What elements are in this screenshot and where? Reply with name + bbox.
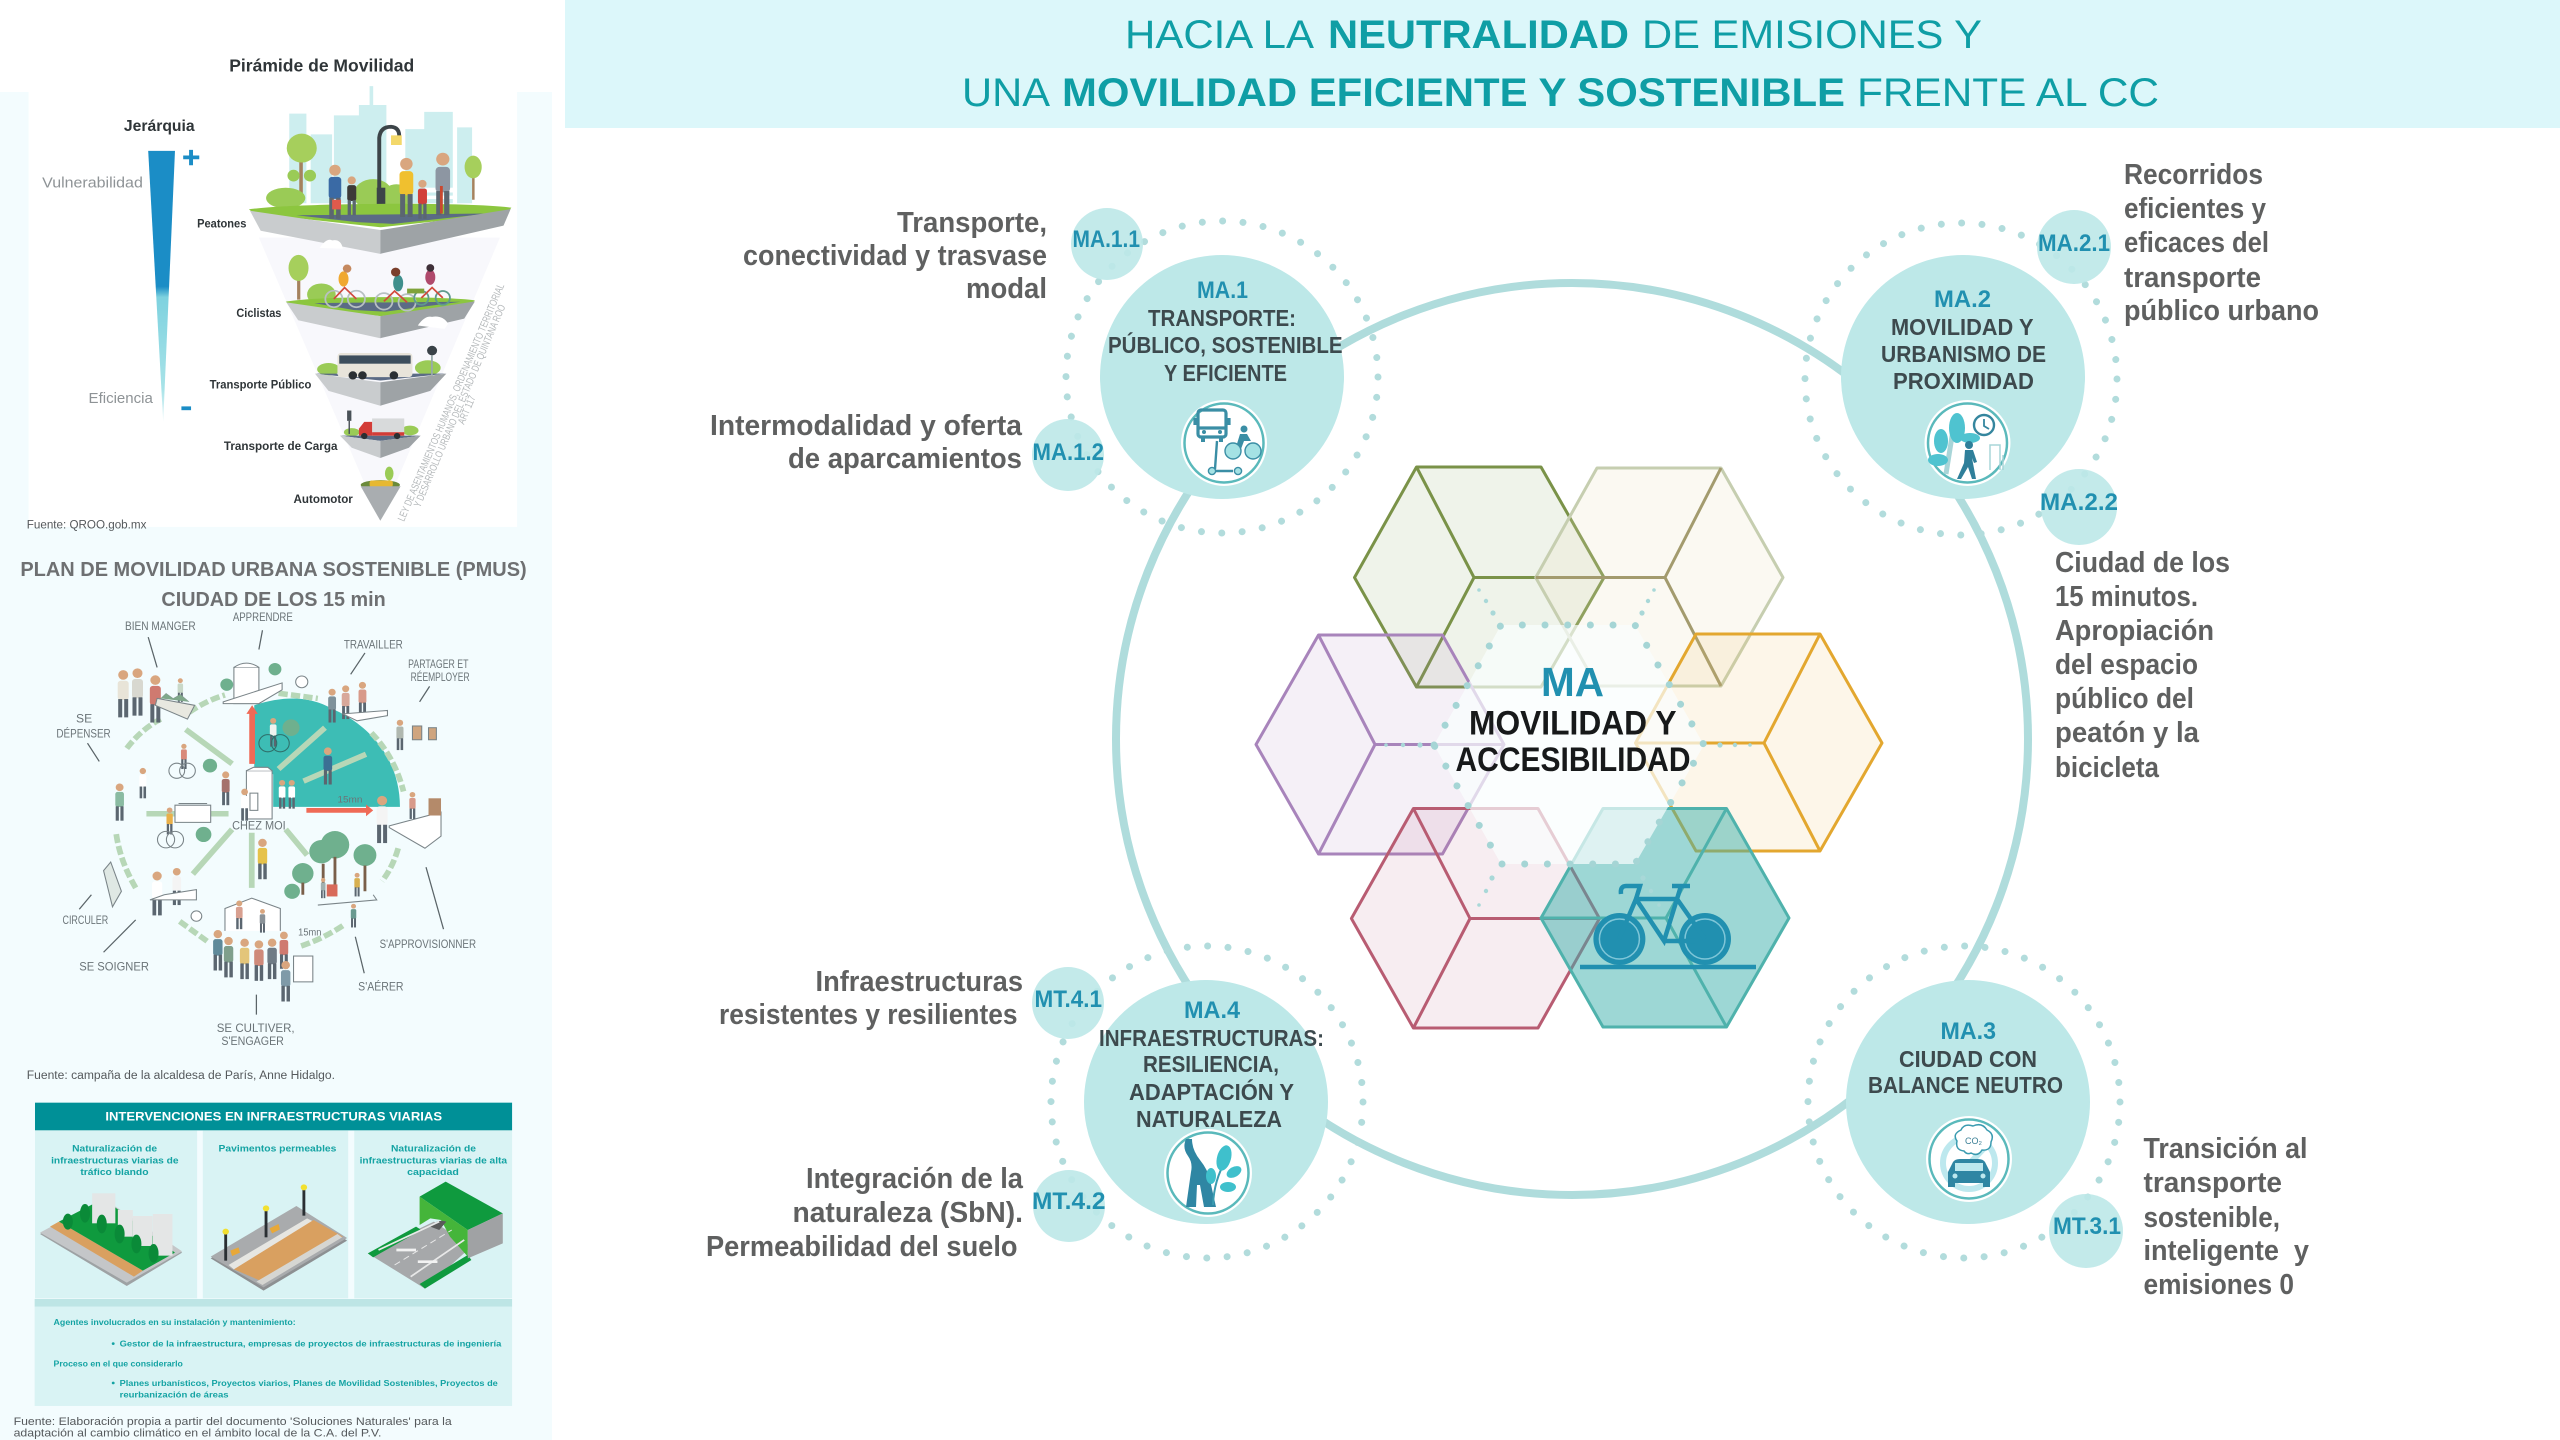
activity labels: SE xyxy=(76,712,92,725)
activity labels: S'AÉRER xyxy=(358,979,404,993)
icon: tree, clock and pedestrian xyxy=(1924,400,2010,486)
activity labels: CHEZ MOI xyxy=(232,818,286,832)
level 3: public transport xyxy=(315,346,446,406)
text: MT.4.2 description: naturaleza (SbN). xyxy=(792,1197,1023,1229)
main bubble xyxy=(1100,255,1344,499)
level 5: private car xyxy=(361,467,401,521)
bubble text: PROXIMIDAD xyxy=(1893,368,2034,394)
activity labels: DÉPENSER xyxy=(56,726,111,740)
text: MA.2.1 description xyxy=(2124,159,2319,327)
text: MA.2.2 description: 15 minutos. xyxy=(2055,581,2198,613)
agents and process text xyxy=(54,1317,502,1399)
level 5 label: Automotor xyxy=(294,492,353,506)
central dotted hexagon xyxy=(1384,588,1752,907)
level 1 label: Peatones xyxy=(197,217,247,230)
panel: left column background xyxy=(0,92,552,1440)
title banner: NEUTRALIDAD xyxy=(1328,13,1629,57)
activity labels: PARTAGER ET xyxy=(408,657,469,671)
agents and process text: Gestor de la infraestructura, empresas de proyectos de infraestructuras de ingeniería xyxy=(120,1339,502,1349)
central haze xyxy=(1434,625,1704,864)
column headings: capacidad xyxy=(407,1167,459,1178)
bubble text: TRANSPORTE: xyxy=(1148,305,1296,331)
bubble text: CIUDAD CON xyxy=(1899,1046,2037,1072)
text: MA.1.1 description: conectividad y trasvase xyxy=(743,240,1047,272)
vulnerability label: Vulnerabilidad xyxy=(42,175,143,192)
text: MA.1.1 description xyxy=(743,207,1047,305)
panel: pirámide de movilidad xyxy=(27,55,517,532)
label MA.2.1: MA.2.1 xyxy=(2038,230,2110,257)
sub-bubble MT.3.1 xyxy=(2049,1194,2123,1268)
text: MT.4.1 description: Infraestructuras xyxy=(816,966,1023,998)
bubble text: BALANCE NEUTRO xyxy=(1868,1072,2063,1098)
text: MT.3.1 description xyxy=(2144,1133,2309,1301)
title banner xyxy=(565,0,2560,128)
label MA.1.2: MA.1.2 xyxy=(1032,439,1104,466)
bubble text: PÚBLICO, SOSTENIBLE xyxy=(1108,331,1342,358)
header bar: INTERVENCIONES EN INFRAESTRUCTURAS VIARIAS xyxy=(105,1110,442,1124)
text: MA.2.2 description: Ciudad de los xyxy=(2055,547,2230,579)
label MA.1.1: MA.1.1 xyxy=(1072,226,1140,253)
activity labels: CIRCULER xyxy=(62,913,108,927)
efficiency label: Eficiencia xyxy=(89,390,153,407)
sub-bubble MT.4.1 xyxy=(1032,967,1104,1039)
sub-bubble MT.4.2 xyxy=(1033,1170,1105,1242)
activity labels: TRAVAILLER xyxy=(344,638,403,651)
text: MA.2.2 description: bicicleta xyxy=(2055,752,2160,784)
home building xyxy=(246,767,272,819)
activity labels: 15mn xyxy=(298,928,321,938)
city heading: CIUDAD DE LOS 15 min xyxy=(161,588,386,611)
level 4: freight xyxy=(340,411,421,458)
text: MA.2.2 description: peatón y la xyxy=(2055,717,2200,749)
level 2 label: Ciclistas xyxy=(236,306,282,320)
bubble text: Y EFICIENTE xyxy=(1164,360,1287,386)
rotated legal note: Y DESARROLLO URBANO DEL ESTADO DE QUINTANA ROO xyxy=(412,303,508,509)
PMUS heading: PLAN DE MOVILIDAD URBANA SOSTENIBLE (PMUS) xyxy=(20,558,527,581)
activity labels: 15mn xyxy=(337,795,362,804)
agents and process text: Proceso en el que considerarlo xyxy=(54,1359,183,1369)
node: MA.2 xyxy=(1805,210,2117,545)
dotted orbit xyxy=(1808,946,2120,1258)
large connecting ring xyxy=(1116,283,2028,1195)
label MT.3.1: MT.3.1 xyxy=(2053,1213,2121,1240)
header bar xyxy=(35,1103,512,1130)
dotted orbit xyxy=(1066,221,1378,533)
bubble text xyxy=(1108,277,1342,386)
light panels xyxy=(35,1131,512,1406)
dotted orbit xyxy=(1051,946,1363,1258)
text: MA.2.2 description: público del xyxy=(2055,683,2194,715)
icon: road with plant xyxy=(1164,1129,1252,1217)
label pointers xyxy=(79,630,444,1015)
text: MA.2.1 description: eficientes y xyxy=(2124,193,2266,225)
source xyxy=(14,1416,453,1440)
sub-bubble MA.2.2 xyxy=(2041,469,2117,545)
hexagon: teal xyxy=(1541,808,1789,1027)
soft traffic street illustration xyxy=(40,1193,182,1286)
level 1: pedestrians xyxy=(249,86,511,254)
school xyxy=(223,663,282,704)
text: MA.1.1 description: Transporte, xyxy=(897,207,1047,239)
column headings: Pavimentos permeables xyxy=(219,1144,336,1155)
rotated legal note: ART 117 xyxy=(456,394,479,426)
bubble text: RESILIENCIA, xyxy=(1143,1051,1279,1077)
bubble text: URBANISMO DE xyxy=(1881,341,2046,367)
text: MA.2.2 description: Apropiación xyxy=(2055,615,2214,647)
hierarchy label: Jerárquia xyxy=(124,117,196,135)
hexagon: sand xyxy=(1536,468,1783,686)
text: MT.4.1 description: resistentes y resilientes xyxy=(719,999,1018,1031)
text: MA.1.2 description xyxy=(710,410,1023,475)
teal quarter zone xyxy=(254,699,400,807)
street trees xyxy=(196,663,376,899)
title banner: HACIA LA xyxy=(1125,13,1314,57)
rotated legal note: LEY DE ASENTAMIENTOS HUMANOS, ORDENAMIENTO TERRITORIAL xyxy=(396,282,507,523)
green paths xyxy=(116,693,404,946)
text: MT.3.1 description: transporte xyxy=(2144,1167,2282,1199)
icon: bicycle xyxy=(1580,886,1756,967)
level 2: cyclists xyxy=(286,255,475,338)
center title: ACCESIBILIDAD xyxy=(1456,741,1690,779)
title banner: FRENTE AL CC xyxy=(1857,71,2159,115)
bubble text: MA.4 xyxy=(1184,997,1241,1024)
bubble text: NATURALEZA xyxy=(1136,1106,1282,1132)
activity labels xyxy=(56,610,476,1048)
column headings: infraestructuras viarias de xyxy=(51,1156,179,1166)
text: MT.4.1 description xyxy=(719,966,1023,1031)
chart title: Pirámide de Movilidad xyxy=(229,55,414,75)
white image backing xyxy=(29,59,517,527)
text: MT.4.2 description xyxy=(706,1163,1024,1263)
text: MA.1.2 description: de aparcamientos xyxy=(788,443,1022,475)
activity labels: SE SOIGNER xyxy=(79,960,149,973)
bubble text xyxy=(1881,286,2046,394)
main bubble xyxy=(1084,980,1328,1224)
bubble text xyxy=(1868,1018,2063,1098)
center title xyxy=(1456,659,1690,779)
central hexagon cluster xyxy=(1256,467,1882,1028)
main bubble xyxy=(1841,255,2085,499)
bubble text: INFRAESTRUCTURAS: xyxy=(1099,1025,1324,1051)
text: MT.3.1 description: sostenible, xyxy=(2144,1202,2280,1234)
agents and process text: reurbanización de áreas xyxy=(120,1390,229,1399)
funnel xyxy=(259,238,500,520)
panel: intervenciones en infraestructuras viarias xyxy=(14,1103,512,1440)
hierarchy wedge xyxy=(148,151,175,422)
text: MA.2.1 description: Recorridos xyxy=(2124,159,2263,191)
text: MA.2.2 description: del espacio xyxy=(2055,649,2198,681)
rotated legal note xyxy=(396,282,508,523)
center title: MA xyxy=(1541,659,1604,705)
bubble text: MA.2 xyxy=(1934,286,1991,313)
bubble text: ADAPTACIÓN Y xyxy=(1129,1078,1294,1105)
label MT.4.1: MT.4.1 xyxy=(1034,986,1102,1013)
text: MA.2.1 description: eficaces del xyxy=(2124,227,2269,259)
bubble text: MA.1 xyxy=(1197,277,1248,304)
panel: ciudad de los 15 minutos xyxy=(20,558,527,1082)
dotted orbit xyxy=(1805,223,2117,535)
title banner: UNA xyxy=(962,71,1050,115)
title banner: DE EMISIONES Y xyxy=(1642,13,1982,57)
people and activities xyxy=(104,668,441,1001)
icon: car with CO2 cloud xyxy=(1926,1116,2012,1202)
title banner: MOVILIDAD EFICIENTE Y SOSTENIBLE xyxy=(1062,71,1845,115)
node: MA.1 xyxy=(1032,208,1378,533)
text: MT.3.1 description: emisiones 0 xyxy=(2144,1269,2294,1301)
bubble text: MOVILIDAD Y xyxy=(1891,314,2034,340)
activity labels: S'ENGAGER xyxy=(221,1034,284,1048)
red arrows xyxy=(246,705,373,816)
source: Fuente: Elaboración propia a partir del documento 'Soluciones Naturales' para la xyxy=(14,1416,453,1428)
text: MA.1.2 description: Intermodalidad y oferta xyxy=(710,410,1023,442)
text: MA.2.2 description xyxy=(2055,547,2230,784)
source: adaptación al cambio climático en el ámbito local de la C.A. del P.V. xyxy=(14,1428,381,1440)
column headings xyxy=(51,1144,508,1178)
sub-bubble MA.1.1 xyxy=(1071,208,1143,280)
level 3 label: Transporte Público xyxy=(210,378,311,391)
column headings: Naturalización de xyxy=(391,1144,477,1155)
source: Fuente: campaña de la alcaldesa de París, Anne Hidalgo. xyxy=(27,1068,335,1082)
permeable pavement illustration xyxy=(211,1184,347,1291)
node: MA.4 xyxy=(1032,946,1363,1258)
activity labels: RÉEMPLOYER xyxy=(411,669,470,684)
agents and process text: Planes urbanísticos, Proyectos viarios, Planes de Movilidad Sostenibles, Proyectos de xyxy=(120,1378,498,1388)
bubble text: MA.3 xyxy=(1940,1018,1996,1045)
plus sign xyxy=(183,150,199,165)
sub-bubble MA.2.1 xyxy=(2037,210,2111,284)
node: MA.3 xyxy=(1808,946,2123,1268)
column headings: tráfico blando xyxy=(80,1167,149,1178)
minus sign xyxy=(181,406,191,410)
activity labels: APPRENDRE xyxy=(233,610,293,624)
icon: bus, bicycle and scooter xyxy=(1181,400,1267,486)
bubble text xyxy=(1099,997,1324,1132)
strip xyxy=(35,1299,512,1307)
main bubble xyxy=(1846,980,2090,1224)
source: Fuente: QROO.gob.mx xyxy=(27,518,146,532)
agents and process text: Agentes involucrados en su instalación y mantenimiento: xyxy=(54,1317,296,1327)
text: MA.2.1 description: transporte xyxy=(2124,262,2261,294)
activity labels: S'APPROVISIONNER xyxy=(380,937,476,951)
text: MA.1.1 description: modal xyxy=(966,273,1047,305)
text: MA.2.1 description: público urbano xyxy=(2124,295,2319,327)
activity labels: BIEN MANGER xyxy=(125,619,196,633)
column headings: infraestructuras viarias de alta xyxy=(360,1156,508,1166)
level 4 label: Transporte de Carga xyxy=(224,439,338,453)
label MA.2.2: MA.2.2 xyxy=(2040,489,2118,516)
hexagon: red xyxy=(1351,808,1600,1028)
sub-bubble MA.1.2 xyxy=(1032,419,1104,491)
hexagon: olive xyxy=(1354,467,1604,687)
column headings: Naturalización de xyxy=(72,1144,158,1155)
text: MT.4.2 description: Permeabilidad del suelo xyxy=(706,1231,1018,1263)
icon: car with CO2 cloud: CO₂ xyxy=(1965,1136,1982,1146)
activity labels: SE CULTIVER, xyxy=(217,1021,295,1035)
hexagon: orange xyxy=(1636,634,1882,851)
center title: MOVILIDAD Y xyxy=(1469,704,1677,742)
label MT.4.2: MT.4.2 xyxy=(1032,1188,1106,1215)
high capacity road tunnel illustration xyxy=(368,1182,503,1289)
text: MT.3.1 description: inteligente y xyxy=(2144,1235,2309,1267)
hexagon: purple xyxy=(1256,635,1504,854)
text: MT.3.1 description: Transición al xyxy=(2144,1133,2308,1165)
text: MT.4.2 description: Integración de la xyxy=(806,1163,1024,1195)
